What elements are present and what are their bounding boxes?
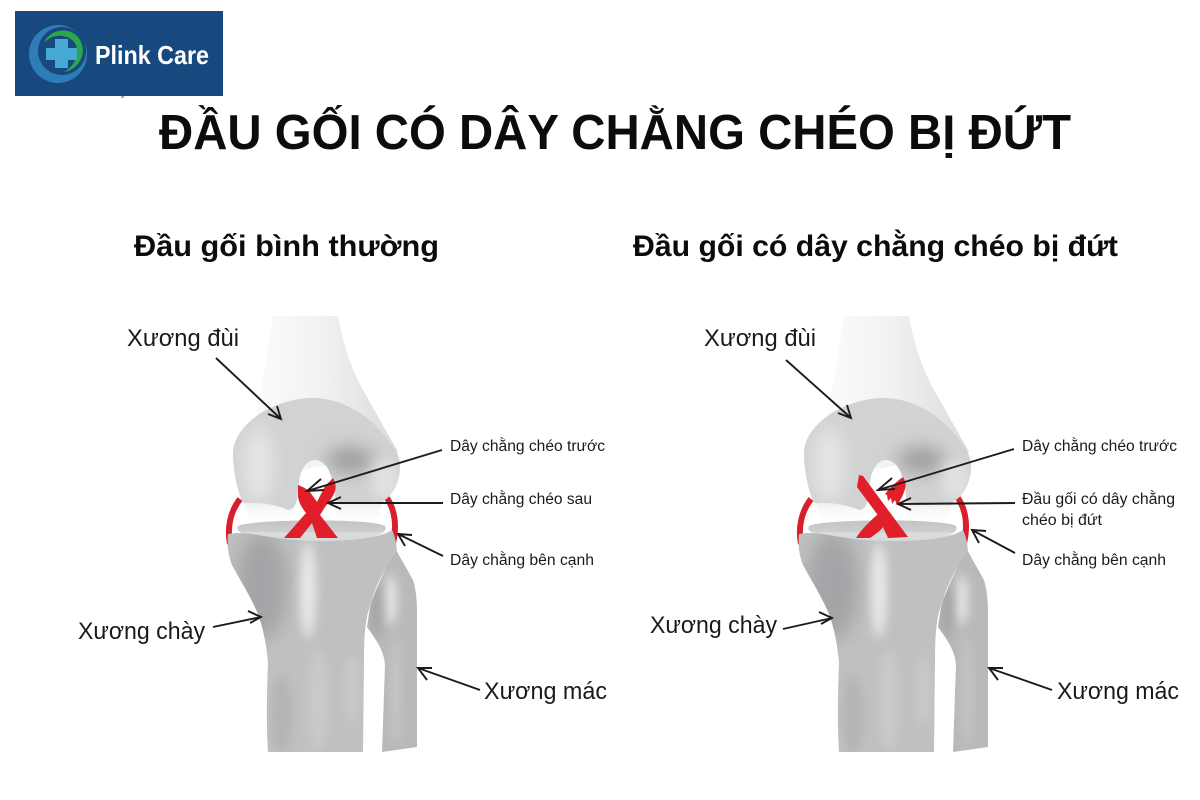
arrows: normal knee xyxy=(213,358,480,690)
labels: torn knee: Dây chằng bên cạnh xyxy=(1022,552,1166,569)
labels: normal knee xyxy=(78,325,607,705)
white condyle left xyxy=(815,497,867,523)
title: ĐẦU GỐI CÓ DÂY CHẰNG CHÉO BỊ ĐỨT xyxy=(159,105,1071,160)
femur condyles xyxy=(804,398,972,510)
labels: normal knee: Xương chày xyxy=(78,618,205,645)
arrows: torn knee xyxy=(783,360,1052,690)
side ligament left xyxy=(800,499,811,544)
labels: normal knee: Dây chằng chéo sau xyxy=(450,491,592,508)
labels: torn knee: Đầu gối có dây chằng xyxy=(1022,491,1175,508)
tibia xyxy=(798,530,968,752)
labels: normal knee: Xương mác xyxy=(484,678,607,705)
fibula xyxy=(938,551,988,752)
femur condyles xyxy=(233,398,400,510)
panel heading: torn ligament knee: Đầu gối có dây chằng chéo bị đứt xyxy=(633,229,1118,263)
labels: normal knee: Dây chằng bên cạnh xyxy=(450,552,594,569)
labels: torn knee: Dây chằng chéo trước xyxy=(1022,438,1177,455)
torn cruciate ligaments xyxy=(856,475,908,538)
fibula xyxy=(367,551,417,752)
logo stray dot xyxy=(121,96,124,98)
labels: torn knee xyxy=(650,325,1179,705)
cruciate ligaments xyxy=(284,478,338,538)
labels: torn knee: Xương mác xyxy=(1057,678,1179,705)
labels: normal knee: Xương đùi xyxy=(127,325,239,352)
side ligament right xyxy=(958,498,966,543)
tibia xyxy=(228,530,397,752)
labels: normal knee: Dây chằng chéo trước xyxy=(450,438,605,455)
labels: torn knee: Xương chày xyxy=(650,612,777,639)
labels: torn knee: chéo bị đứt xyxy=(1022,512,1103,529)
femur shaft xyxy=(256,316,398,470)
femur shaft xyxy=(827,316,969,470)
white condyle left xyxy=(244,497,296,523)
side ligament right xyxy=(387,498,395,543)
logo: Plink Care xyxy=(95,40,209,70)
white condyle right xyxy=(334,497,384,524)
tibial plateau xyxy=(237,520,386,543)
logo xyxy=(15,11,223,96)
panel: normal knee illustration xyxy=(220,316,420,755)
tibial plateau xyxy=(808,520,957,543)
panel heading: normal knee: Đầu gối bình thường xyxy=(134,230,439,263)
labels: torn knee: Xương đùi xyxy=(704,325,816,352)
panel: torn ligament knee illustration xyxy=(791,316,991,755)
white condyle right xyxy=(905,497,955,524)
side ligament left xyxy=(229,499,240,544)
